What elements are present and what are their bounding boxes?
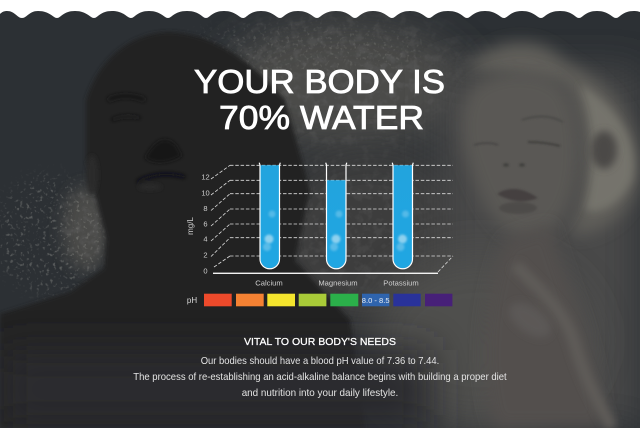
- category labels: Magnesium: [318, 278, 358, 288]
- y axis labels: 10: [201, 188, 210, 198]
- y axis title: mg/L: [186, 217, 195, 235]
- category labels: [255, 278, 419, 288]
- section heading: VITAL TO OUR BODY'S NEEDS: [244, 337, 396, 348]
- woman's facial features: [474, 116, 563, 214]
- body text: [133, 355, 507, 399]
- pH range label: 8.0 - 8.5: [362, 296, 390, 305]
- y axis labels: 4: [203, 235, 208, 244]
- chart: minerals in mg/L: [186, 163, 453, 288]
- test tube: potassium: [392, 163, 413, 269]
- scalloped top edge: [0, 0, 640, 18]
- pH label: pH: [187, 296, 197, 305]
- title: [194, 63, 445, 136]
- test tube: calcium: [259, 163, 280, 269]
- body text: The process of re-establishing an acid-alkaline balance begins with building a proper diet: [133, 371, 507, 383]
- y axis labels: 0: [203, 266, 208, 276]
- man's facial features: [108, 96, 185, 190]
- category labels: Potassium: [383, 278, 419, 288]
- woman silhouette and hair: [370, 42, 640, 428]
- y axis labels: 2: [203, 250, 208, 260]
- y axis labels: 6: [203, 220, 208, 229]
- splash behind the heads: [0, 11, 470, 326]
- category labels: Calcium: [255, 278, 283, 288]
- chart baseline: [213, 273, 438, 274]
- title: 70% WATER: [219, 99, 424, 136]
- y axis labels: 12: [201, 172, 210, 182]
- pH scale: [187, 294, 452, 306]
- body text: Our bodies should have a blood pH value of 7.36 to 7.44.: [201, 355, 439, 367]
- man silhouette: [0, 32, 430, 428]
- y axis labels: [201, 172, 210, 276]
- title: YOUR BODY IS: [194, 63, 445, 100]
- chart grid lines: [211, 165, 453, 272]
- test tube: magnesium: [326, 163, 347, 269]
- body text: and nutrition into your daily lifestyle.: [242, 387, 398, 399]
- y axis labels: 8: [203, 204, 208, 213]
